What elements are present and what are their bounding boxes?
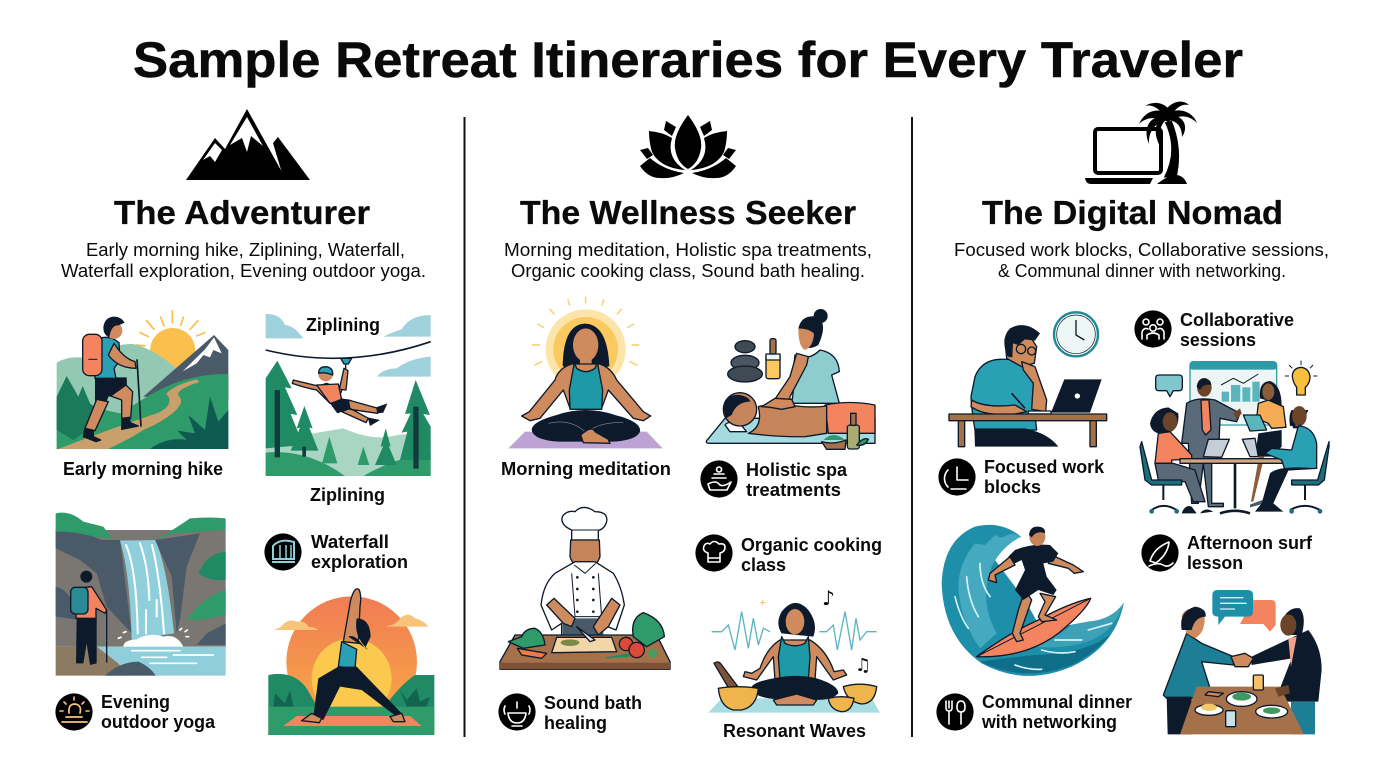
description: Adventurer: Early morning hike, Ziplining, Waterfall, <box>86 240 405 260</box>
icon: clock <box>938 458 976 496</box>
illustration: networking handshake <box>1163 590 1322 734</box>
label: Organic cooking class: Organic cooking <box>741 534 882 555</box>
label: Waterfall exploration: exploration <box>311 551 408 572</box>
description: Digital Nomad: Focused work blocks, Collaborative sessions, <box>954 240 1329 260</box>
label: Evening outdoor yoga: Evening <box>101 691 170 712</box>
label: Focused work blocks: Focused work <box>984 456 1105 477</box>
illustration: yoga at sunset <box>268 589 434 735</box>
label: Morning meditation: Morning meditation <box>501 458 671 479</box>
icon: mountain <box>186 109 310 180</box>
label: Collaborative sessions: sessions <box>1180 329 1256 350</box>
illustration: ziplining <box>266 314 431 476</box>
icon: beamed notes: ♫ <box>855 655 871 676</box>
illustration: waterfall <box>56 513 226 676</box>
label: Holistic spa treatments: treatments <box>746 479 841 500</box>
icon: spa stones <box>700 460 738 498</box>
heading: The Digital Nomad: The Digital Nomad <box>982 194 1283 231</box>
label: Organic cooking class: class <box>741 554 786 575</box>
illustration: sound bath <box>708 600 880 713</box>
title: Sample Retreat Itineraries for Every Traveler <box>133 32 1243 88</box>
label: Ziplining in sky: Ziplining <box>306 314 380 335</box>
label: Holistic spa treatments: Holistic spa <box>746 459 848 480</box>
label: Sound bath healing: healing <box>544 712 607 733</box>
panel: The Wellness Seeker <box>498 115 882 741</box>
label: Afternoon surf lesson: Afternoon surf <box>1187 532 1313 553</box>
icon: laptop and palm <box>1085 102 1197 184</box>
illustration: surfer <box>942 525 1124 676</box>
label: Waterfall exploration: Waterfall <box>311 531 389 552</box>
illustration: early morning hike <box>57 311 228 449</box>
description: Wellness Seeker: Morning meditation, Holistic spa treatments, <box>504 240 872 260</box>
icon: waterfall <box>264 533 302 571</box>
description: Adventurer: Waterfall exploration, Evening outdoor yoga. <box>61 261 426 281</box>
label: Early morning hike: Early morning hike <box>63 458 223 479</box>
heading: The Adventurer: The Adventurer <box>114 194 370 231</box>
panel: The Digital Nomad <box>936 102 1329 734</box>
label: Collaborative sessions: Collaborative <box>1180 309 1294 330</box>
label: Afternoon surf lesson: lesson <box>1187 552 1243 573</box>
illustration: spa massage <box>706 309 875 449</box>
label: Ziplining: Ziplining <box>310 484 385 505</box>
heading: The Wellness Seeker: The Wellness Seeker <box>520 194 856 231</box>
label: Sound bath healing: Sound bath <box>544 692 642 713</box>
icon: collaborative people <box>1134 310 1172 348</box>
icon: surfboard <box>1141 534 1179 572</box>
illustration: focused work <box>949 312 1107 447</box>
label: Focused work blocks: blocks <box>984 476 1041 497</box>
icon: singing bowl <box>498 693 536 731</box>
panel: The Adventurer <box>55 109 434 735</box>
label: Communal dinner with networking: with networking <box>981 711 1117 732</box>
label: Resonant Waves: Resonant Waves <box>723 720 866 741</box>
icon: lotus <box>640 115 736 178</box>
description: Digital Nomad: & Communal dinner with networking. <box>998 261 1286 281</box>
label: Evening outdoor yoga: outdoor yoga <box>101 711 216 732</box>
icon: chef hat <box>695 534 733 572</box>
illustration: chef <box>500 507 670 669</box>
icon: sunset yoga <box>55 693 93 731</box>
icon: music notes: ♪ <box>822 586 835 610</box>
label: Communal dinner with networking: Communal dinner <box>982 691 1132 712</box>
description: Wellness Seeker: Organic cooking class, Sound bath healing. <box>511 261 865 281</box>
illustration: morning meditation <box>508 297 663 448</box>
illustration: team meeting <box>1140 361 1329 514</box>
icon: fork and spoon <box>936 693 974 731</box>
